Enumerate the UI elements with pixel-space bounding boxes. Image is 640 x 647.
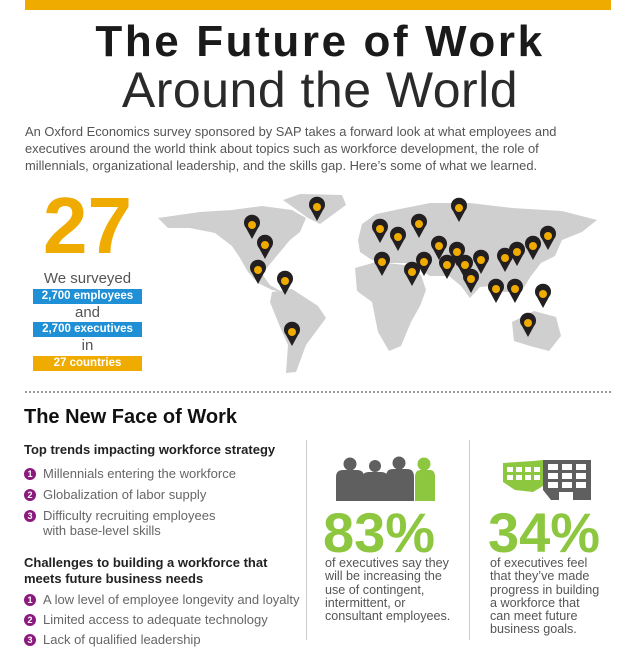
survey summary: and: [75, 304, 100, 321]
stat panel: 83%: [323, 456, 450, 623]
description: [490, 556, 599, 636]
number: 83%: [323, 501, 435, 564]
description: of executives say they: [325, 556, 449, 570]
survey summary: 2,700 executives: [42, 323, 133, 335]
description: a workforce that: [490, 596, 580, 610]
description: can meet future: [490, 609, 578, 623]
description: that they’ve made: [490, 569, 589, 583]
list: challenges: [24, 555, 300, 647]
icon: people: [336, 456, 435, 501]
top orange bar: [25, 0, 611, 10]
list: challenges: Challenges to building a workforce that: [24, 555, 267, 570]
number: 34%: [488, 501, 600, 564]
list: challenges: 2: [27, 615, 32, 625]
list: challenges: meets future business needs: [24, 571, 203, 586]
list: top trends: 1: [27, 469, 32, 479]
intro text: An Oxford Economics survey sponsored by SAP takes a forward look at what employees and executives around the world think about topics such as workforce development, the role of millennials, organizational leadership, and the skills gap. Here’s some of what we learned.: [25, 124, 556, 173]
survey summary: [33, 270, 142, 371]
survey summary: 27 countries: [54, 357, 121, 369]
title: The Future of Work: [95, 17, 545, 66]
survey summary: We surveyed: [44, 270, 131, 287]
list: top trends: Millennials entering the workforce: [43, 466, 236, 481]
list: top trends: [24, 442, 275, 538]
list: top trends: Globalization of labor supply: [43, 487, 206, 502]
description: intermittent, or: [325, 596, 406, 610]
list: challenges: 3: [27, 635, 32, 645]
list: top trends: 2: [27, 490, 32, 500]
description: of executives feel: [490, 556, 587, 570]
list: top trends: Difficulty recruiting employees: [43, 508, 215, 523]
list: top trends: with base-level skills: [43, 523, 161, 538]
stat panel: 34%: [488, 460, 600, 636]
list: challenges: 1: [27, 595, 32, 605]
list: top trends: 3: [27, 511, 32, 521]
description: use of contingent,: [325, 583, 424, 597]
survey summary: in: [82, 337, 93, 354]
world map with pins: [158, 194, 597, 373]
subtitle: Around the World: [122, 62, 518, 118]
description: [325, 556, 450, 623]
description: business goals.: [490, 622, 577, 636]
list: challenges: A low level of employee longevity and loyalty: [43, 592, 300, 607]
survey summary: 2,700 employees: [42, 290, 133, 302]
icon: building grid: [503, 460, 591, 500]
stat: 27: 27: [43, 181, 132, 270]
list: challenges: Limited access to adequate technology: [43, 612, 268, 627]
description: progress in building: [490, 583, 599, 597]
description: will be increasing the: [325, 569, 442, 583]
list: challenges: Lack of qualified leadership: [43, 632, 201, 647]
section heading: The New Face of Work: [24, 406, 237, 428]
description: consultant employees.: [325, 609, 450, 623]
list: top trends: Top trends impacting workforce strategy: [24, 442, 275, 457]
